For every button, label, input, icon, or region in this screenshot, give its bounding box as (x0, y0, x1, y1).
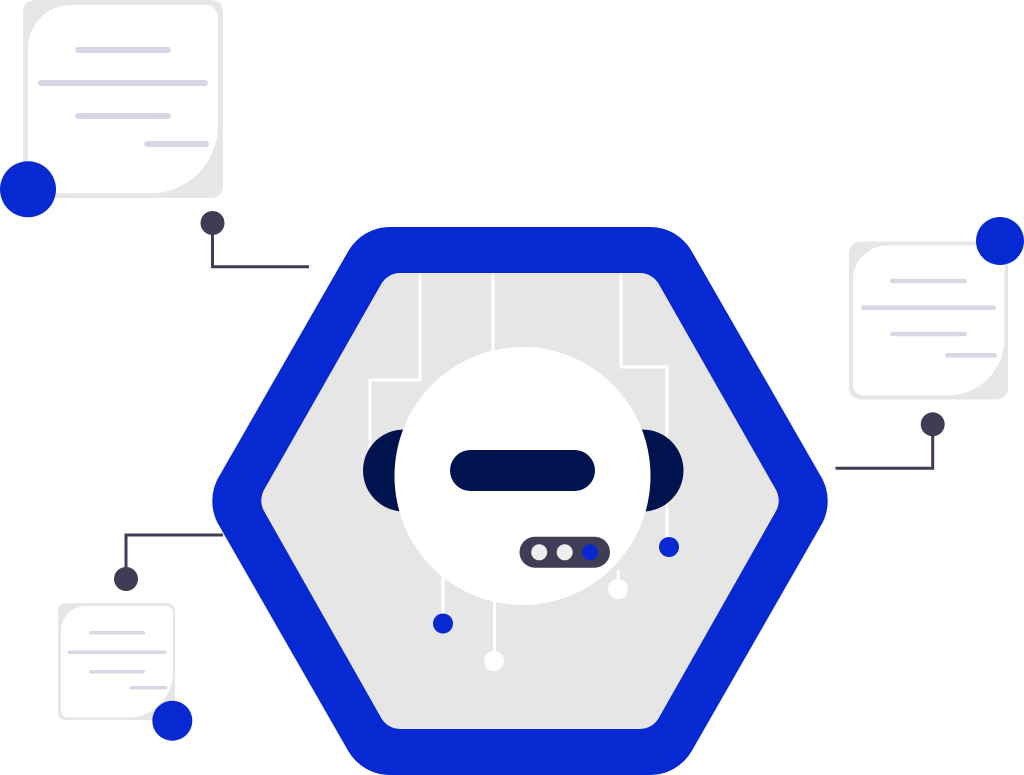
robot circuit wires (370, 273, 667, 660)
robot visor (450, 450, 595, 491)
panel: hexagon frame (212, 227, 828, 775)
connector: bottom left (114, 535, 223, 591)
wire end nodes (433, 537, 679, 671)
document: bottom left (58, 603, 175, 720)
document: top left (23, 0, 223, 198)
robot head (394, 347, 650, 605)
connector: right (836, 412, 945, 468)
icon: blue dot right (976, 217, 1024, 265)
icon: blue dot bottom left (152, 701, 192, 741)
connector: top left (200, 211, 309, 267)
robot ears (363, 430, 684, 512)
icon: blue dot top left (0, 161, 56, 217)
document: right (849, 242, 1008, 400)
robot status indicator (520, 537, 610, 568)
